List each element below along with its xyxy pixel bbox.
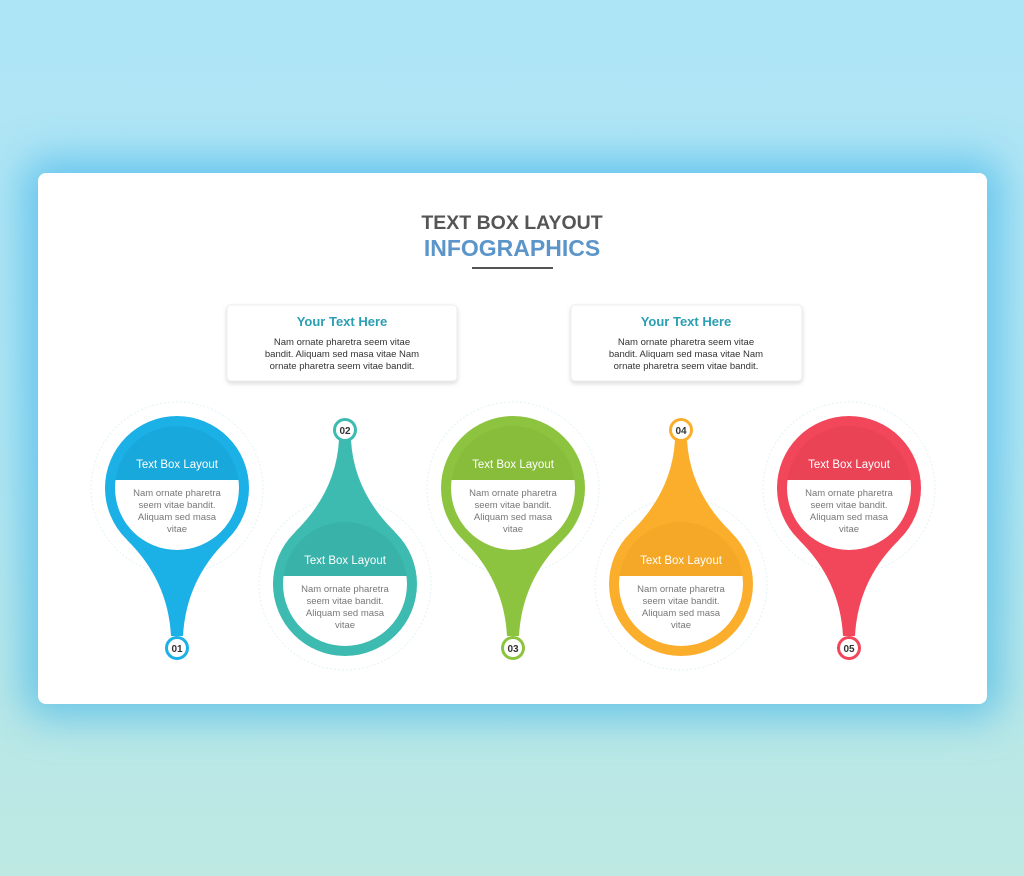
text box: top right [571, 305, 802, 381]
drop 05: 05 [843, 644, 855, 655]
panel: main card [38, 173, 987, 704]
drop 02: seem vitae bandit. [306, 596, 384, 607]
drop 01: Nam ornate pharetra [133, 488, 222, 499]
drop 03 [427, 402, 599, 660]
text box: top right: bandit. Aliquam sed masa vitae Nam [609, 349, 763, 360]
drop 05: Text Box Layout [808, 459, 891, 471]
drop 02: Text Box Layout [304, 555, 387, 567]
drop 02 [259, 418, 431, 670]
drop 04: vitae [671, 620, 691, 631]
drop 03: 03 [507, 644, 519, 655]
drop 03: vitae [503, 524, 523, 535]
title [421, 212, 603, 269]
drop 04: Aliquam sed masa [642, 608, 721, 619]
drop 01 [91, 402, 263, 660]
drop 05: Aliquam sed masa [810, 512, 889, 523]
drop 04: 04 [675, 426, 687, 437]
drop 02: Nam ornate pharetra [301, 584, 390, 595]
title: TEXT BOX LAYOUT [421, 212, 603, 234]
text box: top left: Your Text Here [297, 314, 387, 329]
drop 01: seem vitae bandit. [138, 500, 216, 511]
drop 03: Nam ornate pharetra [469, 488, 558, 499]
text box: top left: bandit. Aliquam sed masa vitae Nam [265, 349, 419, 360]
text box: top right: Nam ornate pharetra seem vitae [618, 337, 754, 348]
drop 03: Text Box Layout [472, 459, 555, 471]
drop 04: Nam ornate pharetra [637, 584, 726, 595]
drop 05 [763, 402, 935, 660]
drop 02: Aliquam sed masa [306, 608, 385, 619]
text box: top left: ornate pharetra seem vitae bandit. [270, 361, 414, 372]
drop 01: 01 [171, 644, 183, 655]
drop 05: seem vitae bandit. [810, 500, 888, 511]
drop 05: Nam ornate pharetra [805, 488, 894, 499]
text box: top left [227, 305, 457, 381]
text box: top left: Nam ornate pharetra seem vitae [274, 337, 410, 348]
drop 02: vitae [335, 620, 355, 631]
drop 03: Aliquam sed masa [474, 512, 553, 523]
drop 01: Text Box Layout [136, 459, 219, 471]
drop 04: seem vitae bandit. [642, 596, 720, 607]
drop 03: seem vitae bandit. [474, 500, 552, 511]
drop 04 [595, 418, 767, 670]
text box: top right: Your Text Here [641, 314, 731, 329]
drop 02: 02 [339, 426, 351, 437]
text box: top right: ornate pharetra seem vitae bandit. [614, 361, 758, 372]
drop 04: Text Box Layout [640, 555, 723, 567]
chart: drop infographic [90, 216, 936, 670]
title: INFOGRAPHICS [424, 235, 600, 261]
drop 05: vitae [839, 524, 859, 535]
drop 01: vitae [167, 524, 187, 535]
drop 01: Aliquam sed masa [138, 512, 217, 523]
